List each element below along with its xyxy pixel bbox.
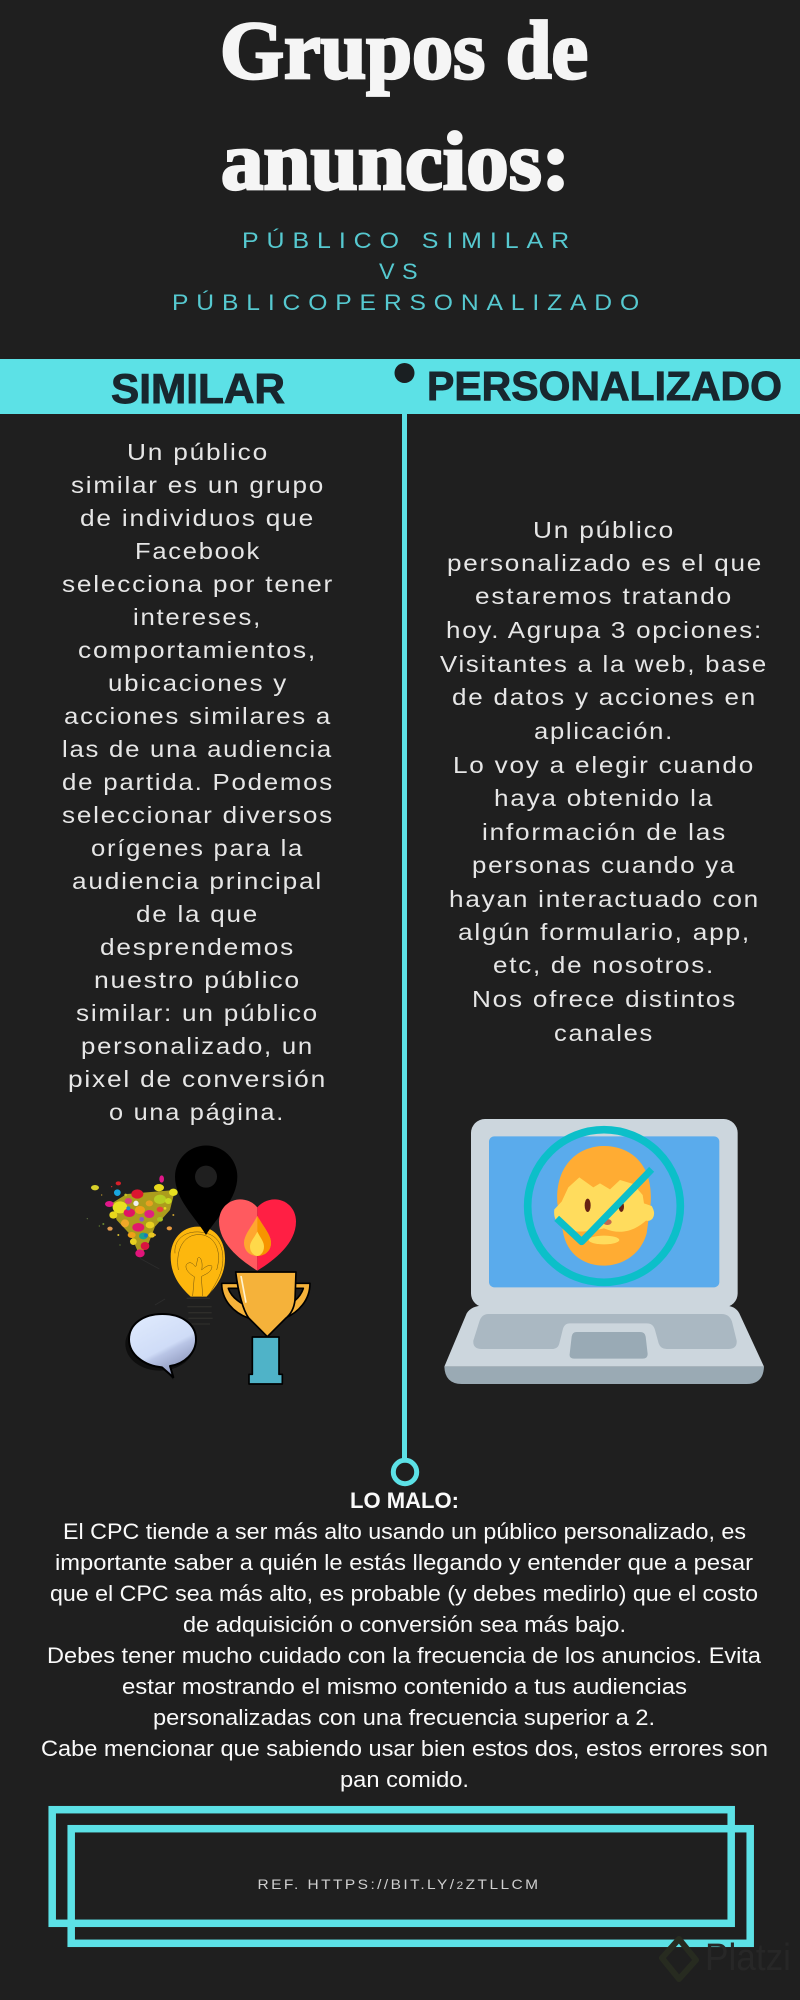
- text block: similar: ubicaciones y: [108, 670, 288, 696]
- text block: personalizado: personalizado es el que: [447, 550, 763, 576]
- text block: similar: comportamientos,: [78, 637, 317, 663]
- text block: similar: de individuos que: [80, 505, 315, 531]
- text block: similar: nuestro público: [94, 967, 301, 993]
- title: Grupos de: [220, 4, 588, 96]
- heading: similar: SIMILAR: [111, 365, 285, 412]
- text block: lo malo: pan comido.: [340, 1767, 469, 1792]
- text block: similar: audiencia principal: [72, 868, 323, 894]
- text block: personalizado: hoy. Agrupa 3 opciones:: [446, 617, 763, 643]
- text block: lo malo: El CPC tiende a ser más alto usando un público personalizado, es: [63, 1519, 746, 1544]
- text block: personalizado: Lo voy a elegir cuando: [453, 752, 755, 778]
- text block: personalizado: información de las: [482, 819, 727, 845]
- text block: similar: selecciona por tener: [62, 571, 334, 597]
- text block: lo malo: personalizadas con una frecuencia superior a 2.: [153, 1705, 655, 1730]
- text block: similar: desprendemos: [100, 934, 295, 960]
- timeline: vertical line with dot and ring: [393, 363, 417, 1484]
- text block: similar: de partida. Podemos: [62, 769, 334, 795]
- icon cluster: similar audience: [87, 1145, 310, 1384]
- watermark: platzi: Platzi: [705, 1937, 791, 1979]
- header band: [0, 359, 800, 414]
- text block: personalizado: haya obtenido la: [494, 785, 714, 811]
- text block: personalizado: [440, 517, 768, 1046]
- text block: personalizado: de datos y acciones en: [452, 684, 757, 710]
- text block: lo malo: estar mostrando el mismo contenido a tus audiencias: [122, 1674, 687, 1699]
- laptop base: [444, 1306, 764, 1384]
- heading: personalizado: PERSONALIZADO: [427, 363, 782, 409]
- subtitle: PÚBLICOPERSONALIZADO: [172, 290, 647, 315]
- icon: laptop with verified face: [444, 1119, 764, 1384]
- text block: personalizado: personas cuando ya: [472, 852, 736, 878]
- text block: personalizado: hayan interactuado con: [449, 886, 760, 912]
- text block: similar: acciones similares a: [64, 703, 332, 729]
- text block: similar: personalizado, un: [81, 1033, 314, 1059]
- text block: personalizado: etc, de nosotros.: [493, 952, 715, 978]
- text block: lo malo: importante saber a quién le estás llegando y entender que a pesar: [55, 1550, 753, 1575]
- text block: lo malo: Cabe mencionar que sabiendo usar bien estos dos, estos errores son: [41, 1736, 768, 1761]
- text block: lo malo: que el CPC sea más alto, es probable (y debes medirlo) que el costo: [50, 1581, 758, 1606]
- text block: personalizado: Visitantes a la web, base: [440, 651, 768, 677]
- text block: personalizado: estaremos tratando: [475, 583, 733, 609]
- icon: colour splatter: [87, 1175, 178, 1257]
- text block: similar: seleccionar diversos: [62, 802, 334, 828]
- icon: trophy: [222, 1272, 310, 1384]
- icon: light bulb: [140, 1227, 225, 1324]
- text block: similar: o una página.: [109, 1099, 285, 1125]
- subtitle: VS: [379, 259, 425, 284]
- text block: personalizado: algún formulario, app,: [458, 919, 751, 945]
- text block: personalizado: Nos ofrece distintos: [472, 986, 737, 1012]
- text block: similar: las de una audiencia: [62, 736, 333, 762]
- title: anuncios:: [221, 115, 570, 207]
- heading: lo malo: LO MALO:: [350, 1488, 459, 1513]
- text block: personalizado: Un público: [533, 517, 675, 543]
- text block: similar: similar: un público: [76, 1000, 319, 1026]
- laptop screen: [489, 1136, 719, 1287]
- text block: similar: [62, 439, 334, 1125]
- subtitle: [172, 228, 647, 315]
- text block: similar: Facebook: [135, 538, 261, 564]
- text block: similar: pixel de conversión: [68, 1066, 327, 1092]
- text block: similar: intereses,: [133, 604, 262, 630]
- text block: similar: similar es un grupo: [71, 472, 325, 498]
- verified ring and check: [528, 1130, 680, 1282]
- reference text: REF. HTTPS://BIT.LY/ 2ZTLLCM: [258, 1876, 540, 1892]
- text block: personalizado: aplicación.: [534, 718, 674, 744]
- text block: lo malo: Debes tener mucho cuidado con la frecuencia de los anuncios. Evita: [47, 1643, 762, 1668]
- text block: lo malo: de adquisición o conversión sea más bajo.: [183, 1612, 626, 1637]
- icon: heart with flame: [219, 1199, 296, 1271]
- subtitle: PÚBLICO SIMILAR: [242, 228, 577, 253]
- laptop lid: [471, 1119, 738, 1307]
- text block: personalizado: canales: [554, 1020, 654, 1046]
- text block: similar: de la que: [136, 901, 259, 927]
- icon: location pin: [175, 1145, 237, 1235]
- text block: similar: Un público: [127, 439, 269, 465]
- title: [220, 4, 588, 207]
- text block: lo malo: [41, 1488, 768, 1792]
- face: [554, 1146, 654, 1266]
- reference frame: [52, 1810, 750, 1943]
- watermark: platzi: [662, 1937, 791, 1979]
- text block: similar: orígenes para la: [91, 835, 304, 861]
- icon: speech bubble: [125, 1314, 196, 1380]
